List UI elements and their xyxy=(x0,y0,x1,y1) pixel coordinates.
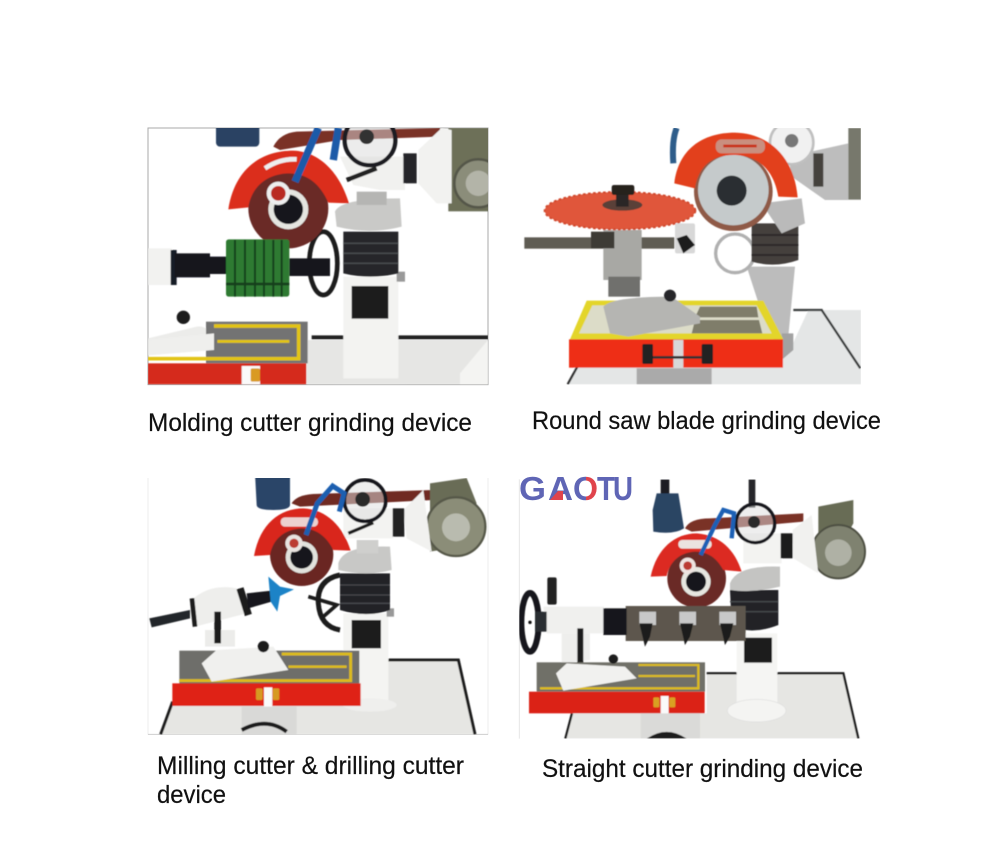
coolant hose xyxy=(306,486,344,535)
tray xyxy=(307,340,488,384)
wheel xyxy=(270,523,333,586)
panel: round saw blade grinding device photo xyxy=(524,121,861,384)
logo: GAOTU: U xyxy=(613,470,633,507)
tray xyxy=(160,660,475,734)
column xyxy=(343,613,388,707)
table xyxy=(148,326,206,340)
motor xyxy=(818,500,853,570)
knob xyxy=(661,479,669,494)
tray xyxy=(565,673,858,739)
caption: molding cutter: Molding cutter grinding device xyxy=(148,409,472,437)
knob xyxy=(255,473,290,510)
straight cutter bar xyxy=(626,606,746,641)
saw post xyxy=(603,230,642,280)
handwheel xyxy=(749,479,755,508)
handwheel xyxy=(342,128,398,168)
caption: round saw blade: Round saw blade grinding device xyxy=(532,407,881,435)
coolant hose xyxy=(673,128,677,163)
panel: straight cutter grinding device photo xyxy=(519,479,865,739)
coolant hose xyxy=(295,128,338,182)
guard xyxy=(228,151,349,209)
wheel xyxy=(248,168,328,248)
top arm xyxy=(273,128,440,150)
logo: GAOTU: O xyxy=(573,470,598,507)
bellows xyxy=(340,573,390,614)
arbor xyxy=(148,248,172,285)
blue cutter xyxy=(268,577,294,612)
rear handwheel xyxy=(318,575,340,630)
spindle arm xyxy=(788,143,848,200)
logo: GAOTU: T xyxy=(597,470,615,507)
handwheel xyxy=(344,480,386,521)
infographic canvas xyxy=(148,128,880,804)
top arm xyxy=(292,490,433,507)
handwheel xyxy=(716,234,754,273)
logo: GAOTU: A xyxy=(548,470,573,507)
holder xyxy=(543,607,607,633)
saw blade xyxy=(545,192,695,229)
rear handwheel xyxy=(309,232,337,295)
caption: milling and drilling cutter: device xyxy=(157,781,226,809)
top handwheel xyxy=(770,121,813,164)
table xyxy=(570,301,783,339)
tray xyxy=(568,310,861,384)
motor xyxy=(430,478,477,552)
caption: milling and drilling cutter: Milling cutter & drilling cutter xyxy=(157,752,464,780)
drill holder xyxy=(192,587,247,627)
column xyxy=(737,633,777,707)
saw support rail xyxy=(524,237,674,249)
guard xyxy=(651,533,742,577)
guard xyxy=(674,133,798,197)
wheel xyxy=(667,549,726,608)
panel: milling and drilling cutter device photo xyxy=(148,473,488,734)
top arm xyxy=(685,513,803,532)
bellows xyxy=(343,232,398,277)
bellows xyxy=(730,590,778,630)
coolant hose xyxy=(701,510,734,555)
column xyxy=(747,267,795,353)
collar xyxy=(335,198,402,231)
swivel base xyxy=(603,297,700,337)
caption: milling and drilling cutter xyxy=(157,752,464,809)
panel: molding cutter grinding device photo xyxy=(148,115,502,385)
table xyxy=(537,662,705,692)
collar xyxy=(338,547,392,573)
table xyxy=(179,651,359,684)
caption: straight cutter: Straight cutter grinding device xyxy=(542,755,863,783)
logo: GAOTU xyxy=(519,470,633,507)
wheel xyxy=(694,152,773,231)
green cutter xyxy=(226,239,289,297)
motor xyxy=(448,128,490,211)
column xyxy=(343,277,398,384)
holder stand xyxy=(205,630,235,647)
knob xyxy=(216,123,259,147)
logo: GAOTU: G xyxy=(519,470,546,507)
bellows xyxy=(752,223,798,265)
guard xyxy=(254,508,351,556)
